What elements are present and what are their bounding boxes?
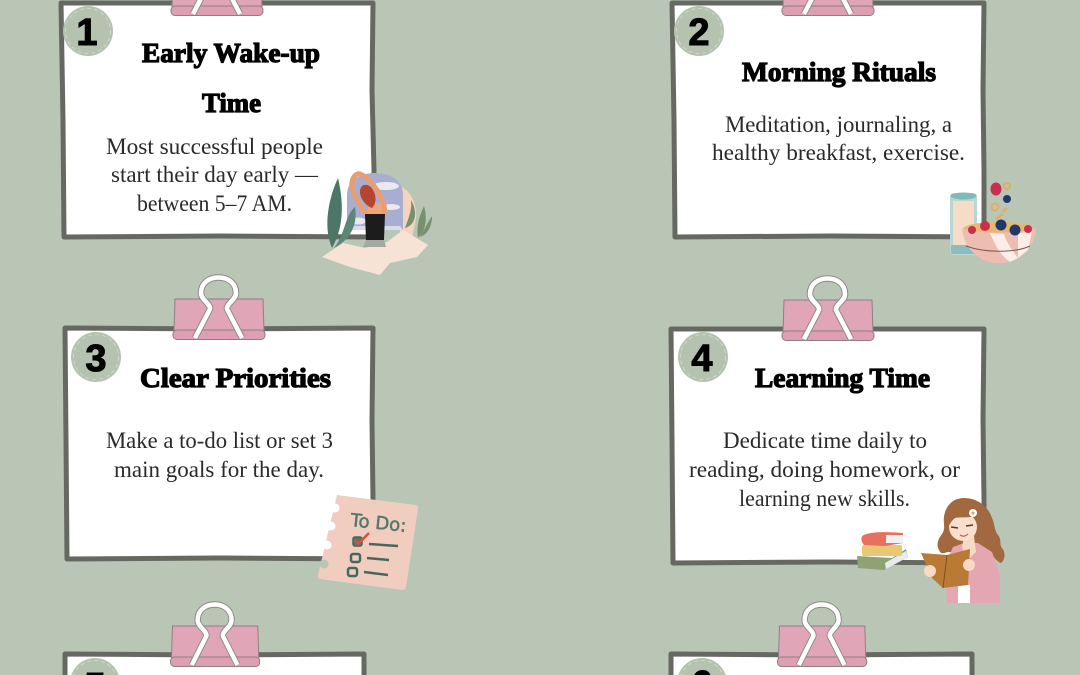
number badge 1 (63, 6, 113, 56)
heading 2: Morning Rituals (742, 57, 936, 87)
binder clip 6 (778, 604, 867, 666)
body text 2: Meditation, journaling, a (725, 112, 952, 137)
binder clip 2 (782, 0, 874, 16)
icon: girl reading (921, 498, 1005, 603)
number badge 3: 3 (85, 338, 107, 380)
body text 4: reading, doing homework, or (689, 457, 960, 482)
card frame 5 (65, 654, 364, 675)
number badge 4 (678, 332, 728, 382)
body text 4: Dedicate time daily to (723, 428, 927, 453)
heading 1 (142, 38, 320, 118)
card frame 1 (61, 3, 374, 237)
number badge 5 (70, 658, 120, 675)
body text 1: start their day early — (111, 162, 319, 187)
card frame 6 (671, 654, 972, 675)
heading 1: Early Wake-up (142, 38, 320, 68)
panel: 4 learning time (671, 278, 1005, 603)
number badge 3 (71, 332, 121, 382)
icon: glass of milk and cereal bowl (950, 182, 1036, 263)
icon: woman stretching on a mat (322, 173, 432, 275)
binder clip 5 (170, 604, 260, 666)
body text 3: main goals for the day. (114, 457, 324, 482)
card frame 3 (65, 328, 373, 559)
icon: to-do note (318, 495, 418, 590)
heading 4: Learning Time (755, 363, 930, 393)
panel: 5 cut-off card (65, 604, 364, 675)
panel: 6 cut-off card (671, 604, 972, 675)
heading 1: Time (202, 88, 261, 118)
binder clip 4 (782, 278, 874, 340)
body text 4: learning new skills. (739, 486, 910, 511)
body text 1: between 5–7 AM. (137, 191, 292, 216)
number badge 2 (674, 6, 724, 56)
body text 3: Make a to-do list or set 3 (106, 428, 333, 453)
body text 2 (712, 112, 965, 165)
icon: stack of books (857, 532, 908, 570)
icon: to-do note: To Do: (348, 510, 407, 537)
number badge 4: 4 (691, 338, 713, 380)
body text 1 (106, 134, 323, 216)
binder clip 1 (171, 0, 263, 16)
body text 4 (689, 428, 960, 511)
binder clip 3 (173, 278, 265, 340)
card frame 2 (672, 3, 984, 237)
number badge 1: 1 (76, 12, 98, 54)
panel: 3 clear priorities (65, 278, 418, 590)
heading 3: Clear Priorities (140, 363, 331, 393)
body text 2: healthy breakfast, exercise. (712, 140, 965, 165)
number badge 2: 2 (688, 12, 710, 54)
panel: 1 early wake-up time (61, 0, 432, 275)
body text 3 (106, 428, 333, 482)
number badge 6 (677, 658, 727, 675)
card frame 4 (671, 329, 984, 563)
body text 1: Most successful people (106, 134, 323, 159)
panel: 2 morning rituals (672, 0, 1036, 263)
